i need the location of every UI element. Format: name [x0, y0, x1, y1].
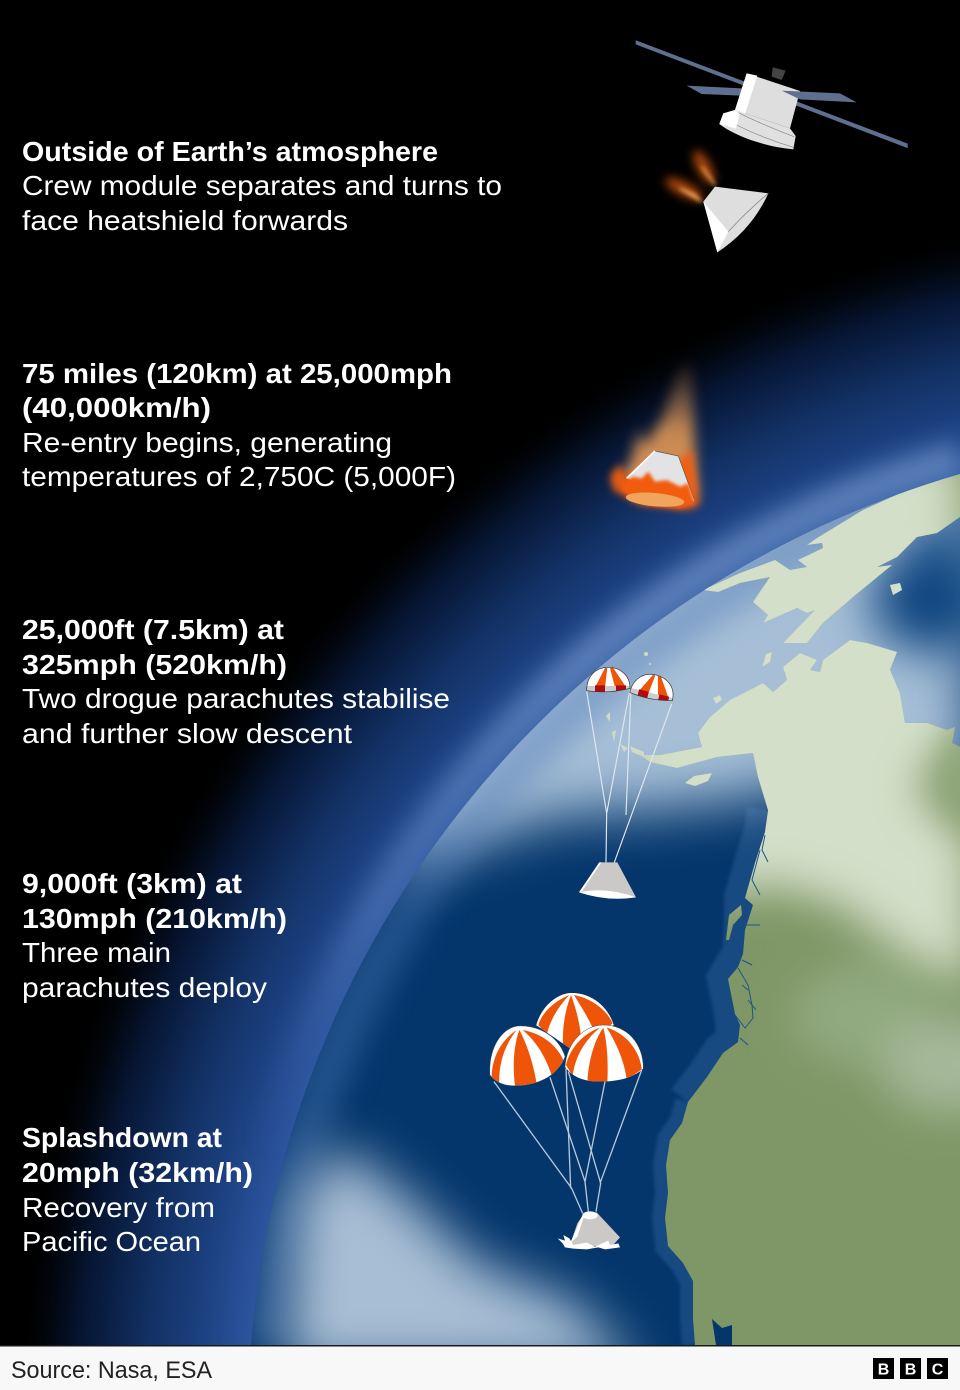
step 5 text	[22, 1122, 253, 1257]
icon: service module with solar arrays	[637, 42, 907, 149]
step 1 text	[22, 136, 502, 236]
step 4 text: 9,000ft (3km) at	[22, 868, 242, 899]
step 3 text: and further slow descent	[22, 718, 352, 749]
Aleutian islands	[606, 652, 651, 757]
step 4 text: Three main	[22, 937, 171, 968]
icon: three main parachutes and splashdown	[487, 990, 645, 1249]
step 2 text: 75 miles (120km) at 25,000mph	[22, 358, 452, 389]
dark blue ocean patch	[872, 517, 960, 652]
drogue parachute right	[629, 674, 674, 701]
clouds over the north Pacific	[395, 440, 960, 875]
clouds over the south Pacific	[285, 1145, 640, 1370]
step 4 text: 130mph (210km/h)	[22, 903, 287, 934]
parachute lines	[587, 689, 672, 862]
coastal shelf	[665, 810, 768, 1345]
step 3 text: 25,000ft (7.5km) at	[22, 614, 284, 645]
main parachute left	[490, 1026, 566, 1086]
step 4 text: parachutes deploy	[22, 972, 267, 1003]
splashdown capsule	[558, 1211, 620, 1249]
land masses	[620, 450, 960, 1350]
step 1 text: Crew module separates and turns to	[22, 170, 502, 201]
source footer	[0, 1345, 960, 1390]
step 1 text: Outside of Earth’s atmosphere	[22, 136, 438, 167]
BBC logo	[873, 1358, 948, 1379]
step 2 text	[22, 358, 456, 492]
fjords and sounds	[735, 835, 768, 1045]
icon: two drogue parachutes and capsule	[579, 665, 681, 899]
ocean	[240, 460, 960, 1346]
BBC logo: C	[932, 1362, 944, 1378]
capsule under drogues	[579, 862, 636, 899]
BBC logo: B	[905, 1362, 916, 1378]
earth globe	[240, 440, 960, 1370]
drogue parachute left	[586, 667, 630, 692]
BBC logo: B	[878, 1362, 889, 1378]
step 3 text: Two drogue parachutes stabilise	[22, 683, 450, 714]
main parachute back	[536, 992, 614, 1048]
icon: crew module with thruster flames	[663, 148, 768, 252]
step 2 text: (40,000km/h)	[22, 392, 211, 423]
step 5 text: Splashdown at	[22, 1122, 222, 1153]
step 1 text: face heatshield forwards	[22, 205, 348, 236]
icon: re-entry capsule with flames	[610, 363, 699, 510]
cloud fade at limb	[265, 488, 960, 1345]
step 5 text: 20mph (32km/h)	[22, 1157, 253, 1188]
step 2 text: Re-entry begins, generating	[22, 427, 392, 458]
parachute lines	[494, 1068, 642, 1213]
step 5 text: Pacific Ocean	[22, 1226, 201, 1257]
step 5 text: Recovery from	[22, 1192, 215, 1223]
main parachute right	[563, 1023, 645, 1083]
step 3 text	[22, 614, 450, 749]
source footer: Source: Nasa, ESA	[11, 1357, 212, 1384]
step 3 text: 325mph (520km/h)	[22, 649, 287, 680]
step 2 text: temperatures of 2,750C (5,000F)	[22, 461, 456, 492]
step 4 text	[22, 868, 287, 1003]
